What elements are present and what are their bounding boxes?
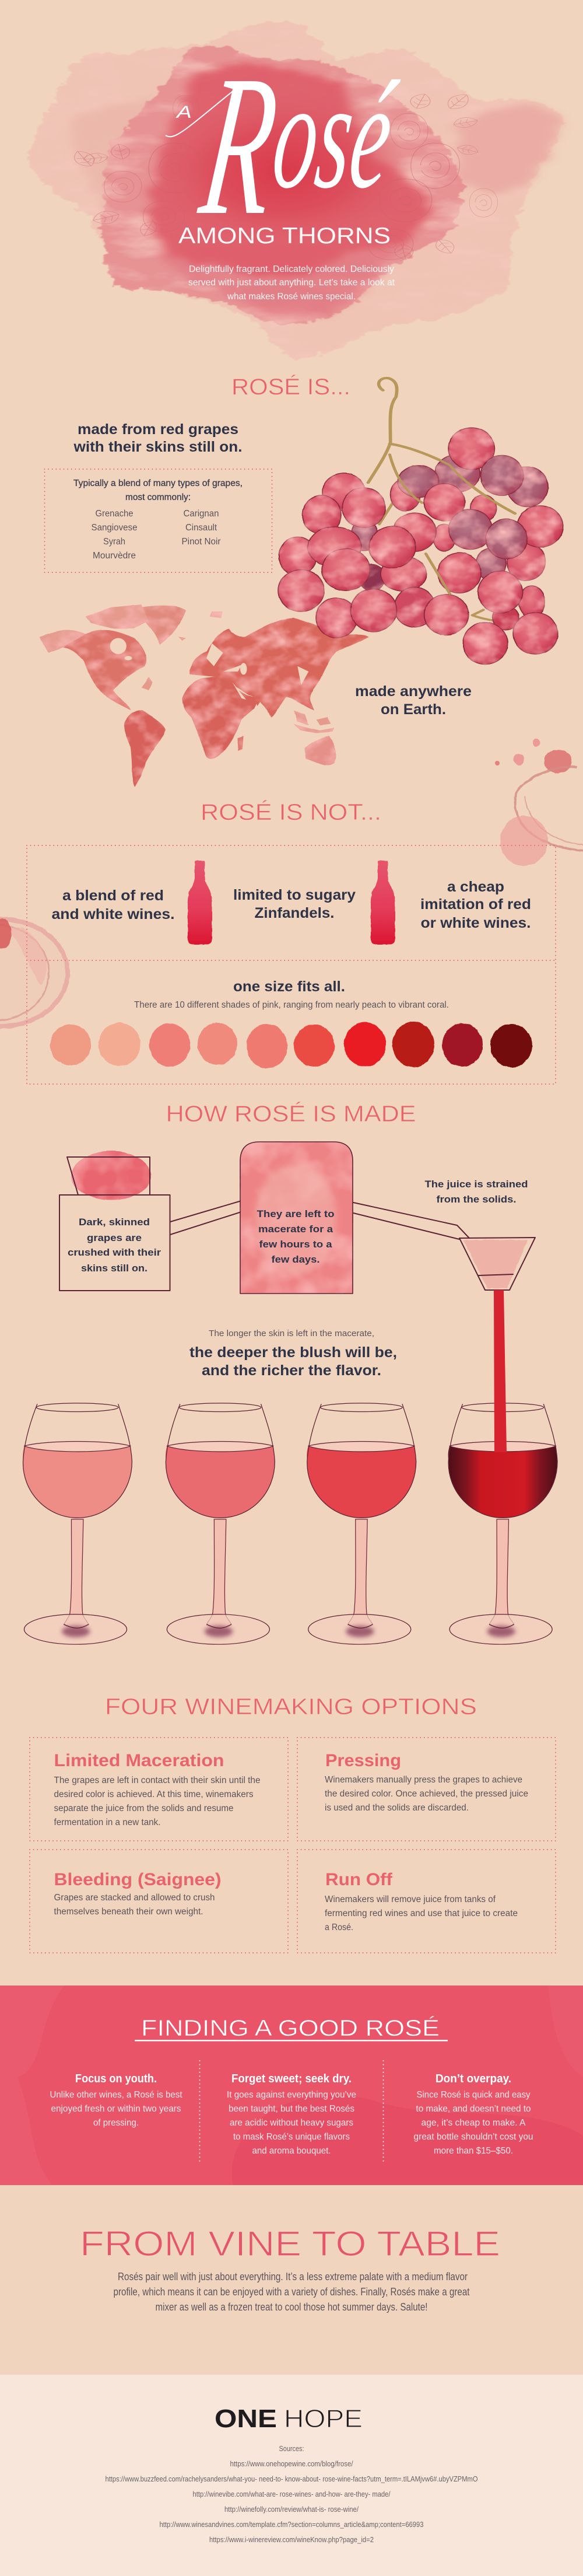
title — [166, 33, 406, 257]
footer panel — [0, 2375, 583, 2576]
panel: pressing: Pressing — [325, 1751, 401, 1770]
column: dry: to mask Rosé’s unique flavors — [233, 2132, 350, 2142]
sources: http://winevibe.com/what-are- rose-wines- and-how- are-they- made/ — [192, 2490, 391, 2498]
sources: https://www.i-winereview.com/wineKnow.php?page_id=2 — [209, 2536, 374, 2544]
band: finding a good rose — [0, 1986, 583, 2185]
heading: from vine to table: FROM VINE TO TABLE — [80, 2224, 500, 2263]
step 1: crush box: Dark, skinned — [79, 1217, 150, 1228]
heading: rose is: ROSÉ IS... — [231, 375, 350, 400]
step 2: maceration tank — [240, 1142, 353, 1294]
heading: four options: FOUR WINEMAKING OPTIONS — [105, 1694, 477, 1719]
icon: bottle — [371, 861, 395, 945]
text: deeper blush: The longer the skin is left in the macerate, — [209, 1329, 374, 1338]
title: R — [190, 33, 288, 257]
panel: grape varieties: Syrah — [103, 537, 125, 547]
step 1: crush box — [59, 1151, 170, 1291]
column: overpay: Don’t overpay. — [436, 2072, 511, 2085]
inland seas and coastal gaps — [110, 638, 308, 717]
panel: grape varieties: Cinsault — [185, 523, 217, 533]
column: youth: Focus on youth. — [75, 2072, 157, 2085]
intro text: Delightfully fragrant. Delicately colored. Deliciously — [189, 264, 394, 274]
text: cheap imitation: imitation of red — [420, 896, 531, 913]
floral line art — [69, 92, 498, 261]
wine glasses — [23, 1403, 557, 1644]
column: overpay: great bottle shouldn’t cost you — [414, 2132, 533, 2142]
text: one size: There are 10 different shades of pink, ranging from nearly peach to vibrant coral. — [134, 1000, 449, 1010]
column: dry: are acidic without heavy sugars — [230, 2118, 353, 2128]
grape cluster illustration — [278, 378, 563, 665]
panel: grape varieties: Pinot Noir — [182, 537, 220, 547]
panel: limited maceration: desired color is achieved. At this time, winemakers — [54, 1789, 254, 1799]
funnel — [459, 1238, 535, 1290]
text: cheap imitation: or white wines. — [421, 915, 531, 931]
column: youth: Unlike other wines, a Rosé is best — [50, 2090, 182, 2100]
column: overpay: Since Rosé is quick and easy — [416, 2090, 531, 2100]
juice stream — [494, 1290, 507, 1452]
panel: pressing: Winemakers manually press the grapes to achieve — [325, 1775, 522, 1785]
panel: pressing: is used and the solids are discarded. — [325, 1803, 469, 1813]
column: youth — [50, 2072, 182, 2128]
heading: rose is not: ROSÉ IS NOT... — [201, 800, 381, 825]
text: blend: a blend of red — [62, 887, 164, 904]
icon: bottle — [188, 861, 212, 945]
sources: http://www.winesandvines.com/template.cfm?section=columns_article&amp;content=66993 — [160, 2521, 424, 2529]
closing paragraph: mixer as well as a frozen treat to cool those hot summer days. Salute! — [155, 2301, 428, 2313]
text: deeper blush: and the richer the flavor. — [202, 1362, 381, 1379]
sources: http://winefolly.com/review/what-is- rose-wine/ — [224, 2505, 359, 2514]
step 2: maceration tank: few days. — [272, 1254, 319, 1265]
statement: anywhere: made anywhere — [355, 683, 472, 700]
intro text: served with just about anything. Let’s take a look at — [188, 278, 395, 288]
panel: bleeding — [30, 1850, 288, 1953]
column: dry: been taught, but the best Rosés — [229, 2104, 354, 2114]
statement: red grapes: made from red grapes — [78, 421, 238, 438]
logo: ONE — [215, 2404, 277, 2433]
sources: Sources: — [279, 2445, 304, 2453]
panel: run off: fermenting red wines and use that juice to create — [325, 1909, 518, 1918]
panel: grape varieties — [44, 469, 272, 572]
title: osé — [265, 49, 405, 221]
text: deeper blush: the deeper the blush will be, — [189, 1344, 397, 1361]
sources — [105, 2445, 478, 2544]
column: youth: enjoyed fresh or within two years — [51, 2104, 181, 2114]
text: deeper blush — [189, 1329, 397, 1379]
wine stain: left — [0, 918, 68, 1026]
logo — [215, 2404, 363, 2433]
panel: limited maceration: fermentation in a new tank. — [54, 1817, 161, 1827]
panel: limited maceration: The grapes are left in contact with their skin until the — [54, 1775, 260, 1785]
column: overpay: more than $15–$50. — [434, 2146, 513, 2156]
column: dry — [227, 2072, 356, 2156]
step 3 caption: The juice is strained — [424, 1179, 528, 1190]
panel: pressing — [297, 1738, 556, 1841]
panel: grape varieties: most commonly: — [125, 492, 191, 502]
glass 1 — [23, 1403, 132, 1644]
panel: run off: a Rosé. — [325, 1923, 353, 1932]
closing paragraph — [113, 2271, 470, 2313]
panel: grape varieties: Grenache — [96, 509, 133, 519]
closing paragraph: profile, which means it can be enjoyed with a variety of dishes. Finally, Rosés make a great — [113, 2286, 470, 2298]
column: dry: Forget sweet; seek dry. — [231, 2072, 352, 2085]
panel: grape varieties: Mourvèdre — [93, 551, 136, 561]
panel: grape varieties: Typically a blend of many types of grapes, — [73, 478, 243, 488]
panel: limited maceration — [30, 1738, 288, 1841]
glass 2 — [166, 1403, 275, 1644]
step 2: maceration tank: few hours to a — [259, 1239, 332, 1250]
text: zinfandels — [233, 887, 356, 921]
panel: limited maceration: separate the juice from the solids and resume — [54, 1803, 233, 1813]
step 1: crush box: grapes are — [87, 1232, 142, 1243]
statement: red grapes — [73, 421, 243, 455]
colour swatches — [50, 1022, 532, 1068]
text: one size — [134, 978, 449, 1010]
step 2: maceration tank: They are left to — [257, 1208, 335, 1219]
column: dry: It goes against everything you’ve — [227, 2090, 356, 2100]
heading: FINDING A GOOD ROSÉ — [141, 2016, 440, 2041]
panel: run off: Run Off — [325, 1870, 393, 1889]
column: overpay: to make, and doesn’t need to — [416, 2104, 531, 2114]
step 2: maceration tank: macerate for a — [258, 1224, 333, 1235]
title: AMONG THORNS — [178, 223, 391, 249]
panel: rose is not — [27, 845, 556, 1084]
text: zinfandels: Zinfandels. — [254, 905, 335, 921]
step 1: crush box: skins still on. — [81, 1263, 147, 1274]
text: blend — [51, 887, 175, 922]
panel: run off: Winemakers will remove juice from tanks of — [325, 1895, 496, 1904]
intro text — [188, 264, 395, 302]
closing paragraph: Rosés pair well with just about everything. It’s a less extreme palate with a medium flavor — [118, 2271, 468, 2283]
column: dry: and aroma bouquet. — [252, 2146, 331, 2156]
step 1: crush box: crushed with their — [68, 1247, 161, 1258]
statement: anywhere: on Earth. — [381, 701, 446, 718]
text: one size: one size fits all. — [233, 978, 345, 995]
text: blend: and white wines. — [51, 906, 175, 922]
statement: red grapes: with their skins still on. — [73, 439, 243, 455]
wine stain: upper right — [495, 739, 583, 866]
sources: https://www.onehopewine.com/blog/frose/ — [230, 2460, 353, 2468]
column: youth: of pressing. — [93, 2118, 139, 2128]
world map — [39, 604, 369, 787]
heading: how rose is made: HOW ROSÉ IS MADE — [166, 1102, 416, 1127]
grapes — [278, 428, 563, 665]
text: cheap imitation: a cheap — [447, 879, 504, 895]
panel: bleeding: Bleeding (Saignee) — [54, 1870, 222, 1889]
title: A — [175, 103, 192, 122]
vine stems — [368, 378, 517, 622]
sources: https://www.buzzfeed.com/rachelysanders/what-you- need-to- know-about- rose-wine-facts?utm_term=.tILAMjvw6#.ubyVZPMmO — [105, 2475, 478, 2483]
column: overpay: age, it’s cheap to make. A — [421, 2118, 526, 2128]
hero watercolor bloom with roses — [26, 21, 565, 360]
text: zinfandels: limited to sugary — [233, 887, 356, 903]
pipes — [170, 1201, 469, 1239]
panel: bleeding: Grapes are stacked and allowed to crush — [54, 1893, 215, 1903]
column: overpay — [414, 2072, 533, 2156]
panel: grape varieties: Carignan — [183, 509, 219, 519]
text: cheap imitation — [420, 879, 531, 931]
glass 3 — [307, 1403, 416, 1644]
glass 4 — [448, 1403, 557, 1644]
step 3 caption — [424, 1179, 528, 1205]
panel: grape varieties: Sangiovese — [91, 523, 138, 533]
panel: limited maceration: Limited Maceration — [54, 1751, 224, 1770]
stems over grapes — [389, 444, 515, 594]
statement: anywhere — [355, 683, 472, 718]
panel: run off — [297, 1850, 556, 1953]
panel: bleeding: themselves beneath their own weight. — [54, 1907, 203, 1917]
logo: HOPE — [284, 2404, 363, 2433]
step 3 caption: from the solids. — [436, 1194, 517, 1205]
intro text: what makes Rosé wines special. — [227, 292, 356, 302]
process diagram — [59, 1142, 535, 1294]
panel: pressing: the desired color. Once achieved, the pressed juice — [325, 1789, 528, 1799]
